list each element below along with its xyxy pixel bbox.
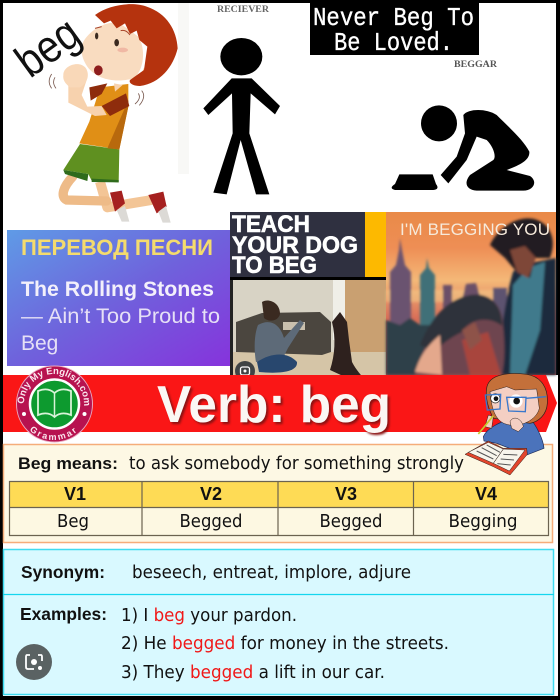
table: verb forms: Beg xyxy=(57,511,89,532)
banner: verb beg xyxy=(3,375,557,434)
panel: song translation card: — Ain’t Too Proud to xyxy=(21,305,220,328)
illustration: praying boy with the word beg xyxy=(49,4,178,223)
synonym list: beseech, entreat, implore, adjure xyxy=(132,562,411,583)
logo: only my english grammar: Grammar xyxy=(30,426,76,440)
panel: song translation card xyxy=(7,230,230,366)
word beg: beg xyxy=(5,6,89,87)
icon: lens badge on photo xyxy=(235,361,255,381)
icon: kneeling beggar with bowl xyxy=(392,105,534,191)
table: verb forms: Begged xyxy=(180,511,242,532)
banner title: Verb: beg xyxy=(157,376,391,434)
table: verb forms: V3 xyxy=(335,484,357,504)
table: verb forms: V4 xyxy=(475,484,497,504)
table: verb forms: Begged xyxy=(320,511,382,532)
example 3: 3) They begged a lift in our car. xyxy=(121,662,385,683)
label: reciever: RECIEVER xyxy=(217,4,270,14)
label: beggar: BEGGAR xyxy=(454,59,498,69)
icon: lens search button xyxy=(16,644,52,680)
panel: synonym and examples xyxy=(3,550,554,694)
panel: song translation card: Beg xyxy=(21,332,58,355)
examples heading: Examples: xyxy=(20,604,107,624)
logo: only my english grammar xyxy=(16,366,93,442)
quote box: never beg to be loved xyxy=(310,3,479,58)
example 2: 2) He begged for money in the streets. xyxy=(121,633,449,654)
quote box: never beg to be loved: Be Loved. xyxy=(334,28,453,58)
table: verb forms: Begging xyxy=(448,511,518,532)
illustration: thinking man with open book xyxy=(465,373,547,475)
logo: only my english grammar: Only My English.com xyxy=(18,368,90,406)
icon: standing stick figure xyxy=(203,38,280,194)
example 1: 1) I beg your pardon. xyxy=(121,605,297,626)
panel: song translation card: The Rolling Stones xyxy=(21,278,214,301)
panel: meaning and verb forms xyxy=(4,444,552,542)
synonym heading: Synonym: xyxy=(21,562,105,582)
table: verb forms: V1 xyxy=(64,484,86,504)
table: verb forms xyxy=(10,481,548,536)
photo: woman training a dog xyxy=(230,280,389,383)
painting: i'm begging you: I'M BEGGING YOU xyxy=(400,220,550,239)
meaning line: Beg means: xyxy=(18,454,118,473)
quote box: never beg to be loved: Never Beg To xyxy=(313,3,474,33)
panel: song translation card: ПЕРЕВОД ПЕСНИ xyxy=(21,235,213,260)
meaning line: to ask somebody for something strongly xyxy=(129,453,464,474)
panel: teach your dog to beg: YOUR DOG xyxy=(232,232,358,259)
table: verb forms: V2 xyxy=(200,484,222,504)
painting: i'm begging you xyxy=(386,212,556,375)
panel: teach your dog to beg: TO BEG xyxy=(232,252,317,279)
panel: teach your dog to beg xyxy=(230,211,389,383)
panel: teach your dog to beg: TEACH xyxy=(232,211,310,238)
